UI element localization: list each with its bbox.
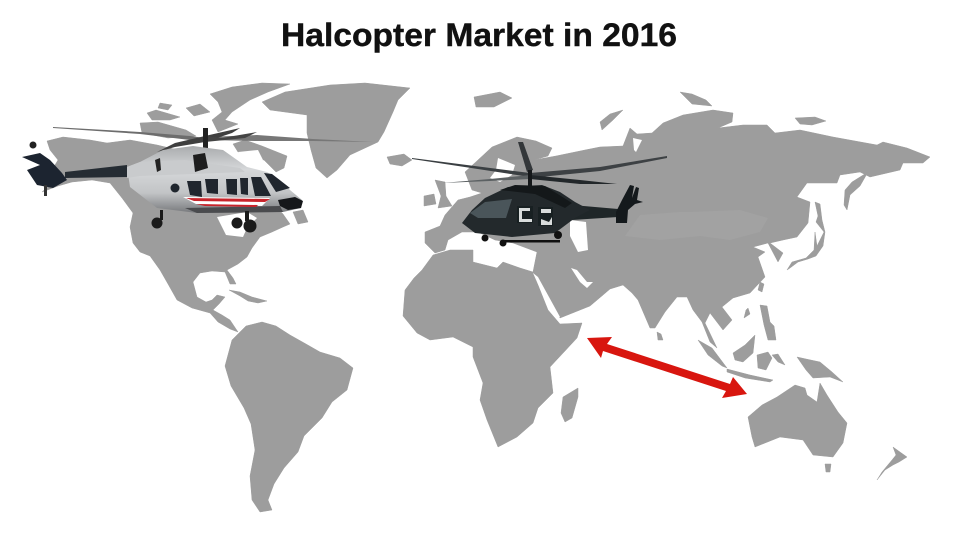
title: Halcopter Market in 2016 [281, 17, 677, 53]
lower stripe [185, 206, 283, 213]
Arctic islands [140, 83, 290, 172]
South America [225, 322, 353, 512]
Japan [787, 202, 825, 270]
Tasmania [825, 464, 831, 472]
tail boom [572, 205, 618, 220]
helicopter: silver civil [22, 127, 373, 232]
tail fin [616, 185, 643, 223]
Great Britain and Ireland [424, 180, 452, 208]
skid gear [482, 231, 562, 246]
Africa [403, 250, 582, 447]
cowl vent [155, 158, 161, 172]
Eurasia [425, 110, 930, 348]
red double-headed arrow [587, 337, 747, 398]
Southeast Asia islands [698, 282, 843, 382]
Greenland [262, 83, 410, 178]
red stripes [183, 197, 270, 207]
top cowling [500, 185, 572, 208]
upper cowling highlight [127, 160, 245, 178]
windshield [470, 199, 512, 218]
engine intake [193, 153, 208, 172]
tail fin [22, 153, 67, 188]
nose [278, 197, 303, 210]
rotor blades [412, 142, 667, 188]
world map [42, 83, 930, 512]
landing gear [152, 210, 256, 232]
Australia [748, 383, 847, 457]
main rotor [53, 127, 373, 152]
Sri Lanka [657, 332, 663, 340]
tail boom [65, 165, 127, 178]
cabin windows [170, 173, 290, 197]
Iceland [387, 154, 412, 166]
Kamchatka [844, 172, 868, 210]
white water cutouts [217, 138, 642, 318]
Arctic Russia islands [474, 92, 826, 130]
fuselage [462, 185, 590, 237]
lighter terrain: Mongolia and Central Asia [625, 210, 768, 240]
Madagascar [561, 388, 578, 422]
New Zealand [877, 447, 907, 480]
helicopter: dark military [412, 142, 667, 246]
fuselage [127, 146, 302, 213]
North America [42, 137, 308, 332]
cabin windows [517, 206, 553, 226]
